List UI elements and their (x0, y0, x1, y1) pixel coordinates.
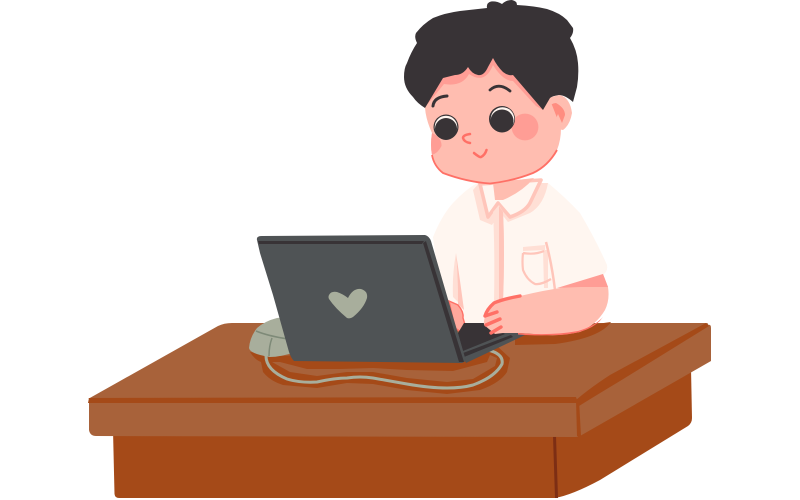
pocket (523, 245, 548, 288)
lid back (257, 235, 466, 363)
desk edge lines (88, 397, 578, 403)
hair (404, 0, 578, 110)
nose (463, 134, 470, 143)
desk base corner line (553, 436, 558, 498)
mouse button lines (256, 331, 288, 356)
collar (480, 180, 541, 217)
desk base front (113, 430, 556, 498)
desk top surface (88, 323, 708, 415)
forehead shading (427, 50, 543, 110)
cheek right (512, 114, 538, 140)
left eyebrow (433, 96, 447, 106)
arm underline (518, 317, 603, 335)
desk patch inside cable (272, 355, 497, 382)
sleeve crease (453, 253, 458, 302)
mouse cable (266, 350, 502, 388)
boy torso (433, 178, 607, 325)
mouse body (249, 316, 296, 357)
placket (493, 205, 504, 302)
boy head (404, 0, 578, 184)
desk base side (555, 368, 692, 498)
collar shading (473, 183, 548, 225)
neck (493, 178, 534, 200)
desk front edge (89, 400, 578, 437)
hand outline and fingers (485, 296, 520, 333)
ear (545, 95, 572, 130)
desk shadows under objects (250, 322, 611, 394)
right eyebrow (490, 86, 510, 91)
desk (88, 323, 711, 498)
desk side edge (578, 325, 711, 436)
shadow: arm (515, 322, 611, 345)
face (425, 60, 561, 184)
right eye (489, 106, 515, 132)
heart logo (328, 289, 367, 318)
cheek left (431, 133, 442, 155)
boy left hand (449, 301, 466, 332)
laptop lid (257, 235, 466, 363)
laptop keyboard base (458, 323, 525, 363)
mouse (249, 316, 296, 357)
boy arm (484, 274, 609, 335)
shirt (433, 183, 607, 325)
upper arm band (557, 274, 608, 288)
lid top edge (258, 241, 424, 244)
shadow: mouse and cable (250, 346, 510, 394)
lid hinge edge (423, 241, 464, 362)
chin line (432, 150, 557, 184)
arm (484, 274, 609, 335)
mouth (474, 150, 486, 157)
left eye (434, 114, 458, 140)
